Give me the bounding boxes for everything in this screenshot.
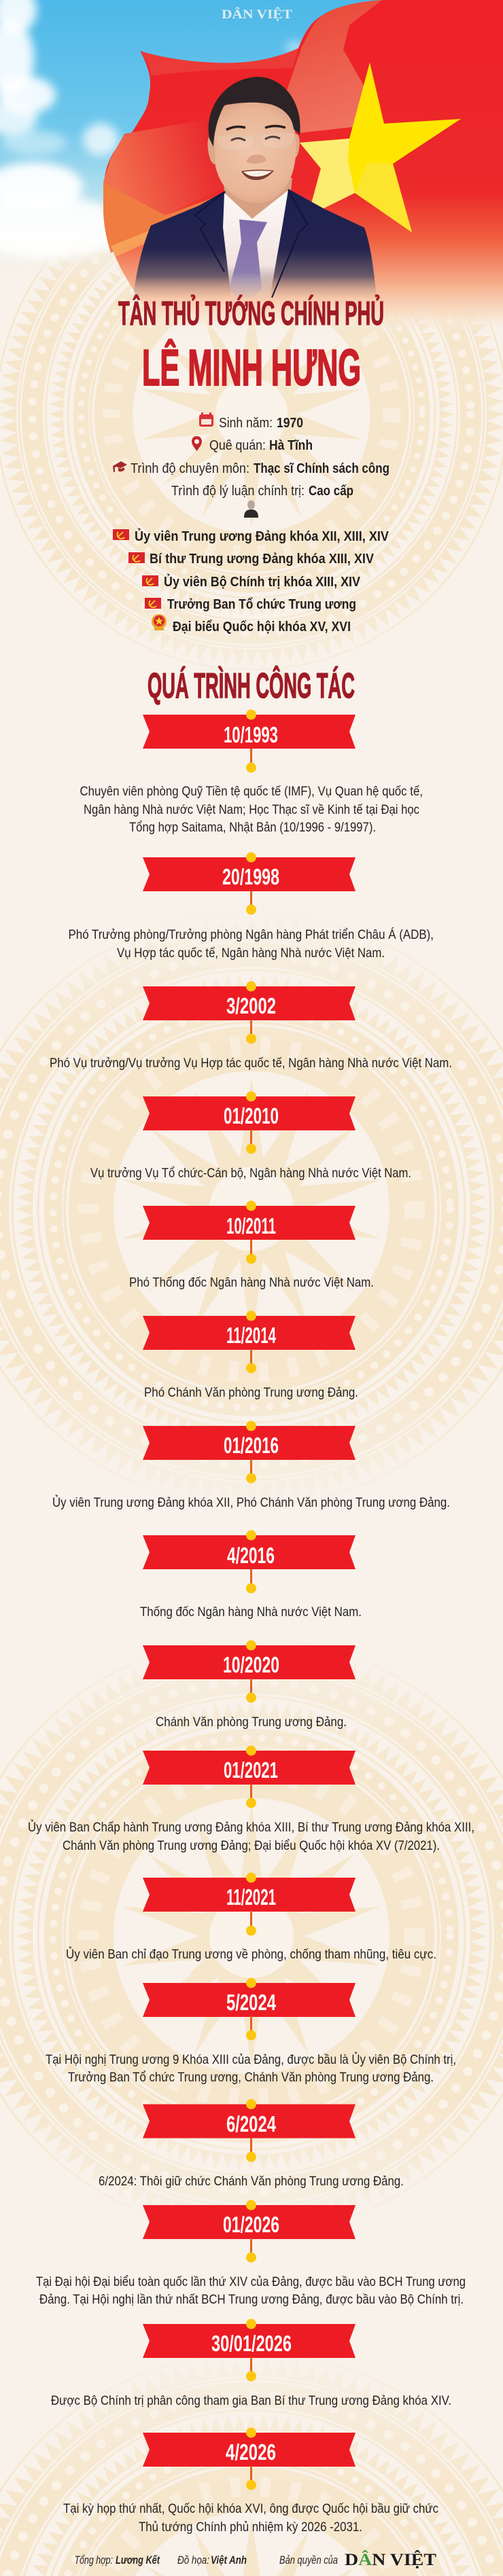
education: Thạc sĩ Chính sách công <box>254 461 389 476</box>
icon: person <box>244 500 258 518</box>
timeline entry: 01/2010: Vụ trưởng Vụ Tổ chức-Cán bộ, Ngân hàng Nhà nước Việt Nam. <box>90 1166 411 1181</box>
suit <box>133 189 377 298</box>
footer credits <box>75 2550 436 2569</box>
logo: Dân Việt footer: DÂN VIỆT <box>345 2550 436 2569</box>
flag body <box>103 0 503 333</box>
star <box>300 62 461 232</box>
timeline entry: 11/2021: Ủy viên Ban chỉ đạo Trung ương về phòng, chống tham nhũng, tiêu cực. <box>66 1946 436 1962</box>
timeline entry: 11/2014 <box>143 1311 358 1400</box>
timeline entry: 11/2014: 11/2014 <box>226 1323 276 1348</box>
glasses <box>218 133 294 149</box>
flag shaded upper left fold <box>140 48 298 76</box>
star light facet <box>300 139 355 216</box>
birth year: Sinh năm: <box>219 415 273 431</box>
flag icon 3 <box>142 575 158 586</box>
hometown <box>209 437 313 453</box>
flag icon 4 <box>145 598 161 609</box>
footer credits: Việt Anh <box>211 2554 247 2566</box>
timeline entry: 4/2016: Thống đốc Ngân hàng Nhà nước Việt Nam. <box>140 1605 362 1620</box>
timeline entry: 01/2016 <box>52 1421 450 1510</box>
background: drum pattern third <box>0 1663 503 2209</box>
timeline entry: 6/2024: 6/2024 <box>226 2111 276 2136</box>
timeline entry: 5/2024 <box>46 1978 456 2085</box>
position 4: Trưởng Ban Tổ chức Trung ương <box>167 596 356 612</box>
flag orange fold <box>103 182 224 253</box>
timeline entry: 01/2016: Ủy viên Trung ương Đảng khóa XII, Phó Chánh Văn phòng Trung ương Đảng. <box>52 1494 450 1510</box>
timeline entry: 4/2026 <box>63 2428 438 2535</box>
position 1: Ủy viên Trung ương Đảng khóa XII, XIII, XIV <box>135 528 389 544</box>
timeline entry: 3/2002: 3/2002 <box>226 993 276 1018</box>
mouth <box>241 170 274 180</box>
background: drum pattern top <box>0 251 503 670</box>
timeline entry: 10/1993 <box>80 709 423 835</box>
footer credits: Lương Kết <box>116 2554 160 2566</box>
timeline entry: 4/2016 <box>140 1530 362 1620</box>
timeline entry: 10/2011: Phó Thống đốc Ngân hàng Nhà nước Việt Nam. <box>129 1275 374 1290</box>
lapels <box>195 190 307 298</box>
timeline entry: 01/2021: 01/2021 <box>224 1757 278 1783</box>
timeline entry: 10/2011: 10/2011 <box>226 1213 276 1238</box>
icon: location pin <box>192 436 202 451</box>
portrait <box>133 77 377 298</box>
position 3: Ủy viên Bộ Chính trị khóa XIII, XIV <box>164 573 360 590</box>
timeline entry: 20/1998: Phó Trưởng phòng/Trưởng phòng Ngân hàng Phát triển Châu Á (ADB), <box>68 927 434 942</box>
timeline entry: 30/01/2026: 30/01/2026 <box>211 2331 292 2356</box>
neck <box>223 178 292 221</box>
timeline entry: 6/2024: 6/2024: Thôi giữ chức Chánh Văn phòng Trung ương Đảng. <box>99 2174 404 2189</box>
flag icon 1 <box>113 529 129 540</box>
timeline entry: 01/2021: Chánh Văn phòng Trung ương Đảng; Đại biểu Quốc hội khóa XV (7/2021). <box>63 1838 440 1853</box>
nose <box>246 155 266 164</box>
header sky <box>0 0 503 285</box>
icon: calendar <box>199 412 213 427</box>
footer credits: Đồ họa: <box>177 2554 209 2566</box>
footer credits: Bản quyền của <box>279 2554 338 2566</box>
flag highlight band <box>111 201 224 257</box>
timeline entry: 10/1993: 10/1993 <box>224 722 278 747</box>
political level: Trình độ lý luận chính trị: <box>171 483 305 499</box>
timeline entry: 20/1998: Vụ Hợp tác quốc tế, Ngân hàng Nhà nước Việt Nam. <box>117 946 385 961</box>
timeline entry: 10/1993: Chuyên viên phòng Quỹ Tiền tệ quốc tế (IMF), Vụ Quan hệ quốc tế, <box>80 784 423 799</box>
timeline entry: 01/2026: 01/2026 <box>223 2212 279 2237</box>
eyebrows <box>226 126 285 130</box>
flag icon 2 <box>128 552 145 563</box>
timeline entry: 01/2016: 01/2016 <box>224 1433 279 1458</box>
hair <box>209 77 300 147</box>
hometown: Quê quán: <box>209 437 266 453</box>
timeline entry: 3/2002: Phó Vụ trưởng/Vụ trưởng Vụ Hợp tác quốc tế, Ngân hàng Nhà nước Việt Nam. <box>50 1056 452 1071</box>
timeline entry: 10/2020: Chánh Văn phòng Trung ương Đảng. <box>156 1715 347 1730</box>
face <box>214 101 296 203</box>
teeth <box>243 171 272 177</box>
timeline entry: 10/1993: Ngân hàng Nhà nước Việt Nam; Học Thạc sĩ về Kinh tế tại Đại học <box>84 802 419 817</box>
education: Trình độ chuyên môn: <box>131 461 249 476</box>
timeline entry: 01/2021 <box>28 1746 474 1853</box>
timeline entry: 11/2021: 11/2021 <box>226 1884 276 1910</box>
timeline entry: 6/2024 <box>99 2099 404 2189</box>
flag light fold <box>285 0 383 133</box>
star facet <box>355 163 412 232</box>
background: drum pattern bottom <box>0 2376 503 2576</box>
timeline entry: 10/2011 <box>129 1201 374 1290</box>
background: drum pattern second <box>0 936 503 1482</box>
clouds <box>0 0 305 259</box>
timeline entry: 30/01/2026: Được Bộ Chính trị phân công tham gia Ban Bí thư Trung ương Đảng khóa XIV. <box>51 2393 451 2408</box>
timeline entry: 20/1998 <box>68 852 434 961</box>
ears <box>207 134 300 164</box>
personal info <box>113 412 389 634</box>
timeline entry: 10/2020: 10/2020 <box>223 1652 279 1677</box>
timeline entry: 01/2010: 01/2010 <box>224 1103 279 1128</box>
logo: Dân Việt top: DÂN VIỆT <box>222 7 292 22</box>
education <box>131 461 389 476</box>
flag salmon mid fold <box>103 118 222 215</box>
icon: graduation cap <box>113 461 127 472</box>
footer credits: Tổng hợp: <box>75 2554 113 2566</box>
timeline entry: 01/2026 <box>36 2200 466 2307</box>
title <box>118 295 384 396</box>
timeline entry: 4/2016: 4/2016 <box>227 1543 275 1568</box>
timeline entry: 10/2020 <box>143 1640 355 1730</box>
timeline entry: 30/01/2026 <box>51 2319 451 2408</box>
timeline entry: 20/1998: 20/1998 <box>222 864 279 889</box>
timeline entry: 10/1993: Tổng hợp Saitama, Nhật Bản (10/1996 - 9/1997). <box>129 820 376 835</box>
timeline entry: 4/2026: Tại kỳ họp thứ nhất, Quốc hội khóa XVI, ông được Quốc hội bầu giữ chức <box>63 2501 438 2516</box>
shirt <box>223 190 288 298</box>
icon: national emblem <box>152 614 167 630</box>
timeline entry: 11/2014: Phó Chánh Văn phòng Trung ương Đảng. <box>144 1385 358 1400</box>
hometown: Hà Tĩnh <box>269 437 313 453</box>
position 2: Bí thư Trung ương Đảng khóa XIII, XIV <box>150 551 374 567</box>
Vietnamese flag <box>103 0 503 333</box>
eyes <box>231 137 280 141</box>
timeline entry: 5/2024: Trưởng Ban Tổ chức Trung ương, Chánh Văn phòng Trung ương Đảng. <box>68 2070 434 2085</box>
timeline entry: 01/2010 <box>90 1091 411 1181</box>
timeline entry: 5/2024: 5/2024 <box>226 1990 276 2015</box>
tie <box>229 219 267 298</box>
birth year: 1970 <box>277 415 303 431</box>
timeline entry: 3/2002 <box>50 981 452 1071</box>
political level: Cao cấp <box>309 483 353 499</box>
timeline entry: 11/2021 <box>66 1872 436 1962</box>
timeline entry: 4/2026: Thủ tướng Chính phủ nhiệm kỳ 2026 -2031. <box>139 2520 362 2535</box>
timeline entry: 4/2026: 4/2026 <box>226 2439 276 2465</box>
position 5: Đại biểu Quốc hội khóa XV, XVI <box>173 619 351 634</box>
